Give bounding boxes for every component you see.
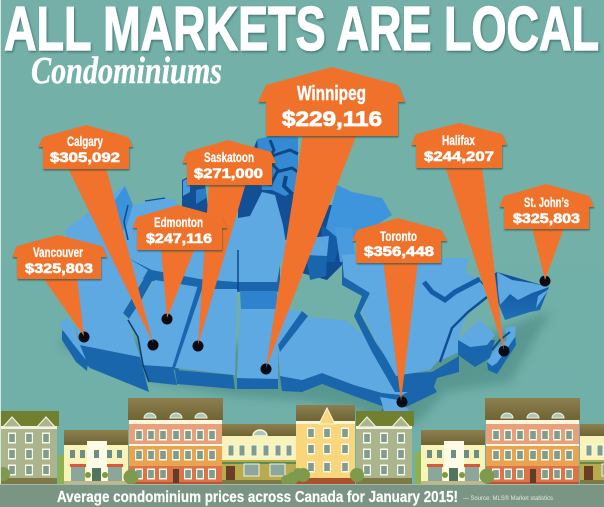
manitoba [237,291,302,389]
marker: Calgary: $305,092 [50,149,120,165]
marker: Winnipeg: $229,116 [282,108,382,131]
marker: Vancouver: $325,803 [25,260,93,276]
marker: Winnipeg [258,67,405,374]
marker: Vancouver [12,235,107,342]
subtitle: Condominiums [31,50,222,92]
marker: Saskatoon: $271,000 [194,165,263,181]
left edge strip [0,0,1,484]
east nunavut and baffin [298,185,392,280]
maritimes [458,320,516,374]
quebec [342,254,487,392]
marker: Vancouver: Vancouver [33,244,83,260]
caption band [0,484,604,507]
marker: Halifax: Halifax [442,132,475,148]
british columbia [59,258,156,392]
marker: Saskatoon: Saskatoon [204,149,254,165]
marker: St. John's [499,184,594,286]
arctic islands [182,136,298,240]
caption: Average condominium prices across Canada for January 2015! [57,489,458,506]
ontario [278,311,437,432]
alberta [128,280,198,385]
marker: Edmonton: $247,116 [146,230,212,246]
marker: Toronto: $356,448 [364,243,434,259]
marker: Halifax [411,123,510,356]
saskatchewan [172,285,237,389]
yellow building [296,405,355,484]
marker: St. John's: $325,803 [513,210,580,226]
marker: Toronto: Toronto [380,228,417,244]
marker: Calgary: Calgary [67,133,103,149]
marker: Halifax: $244,207 [424,148,494,164]
map of Canada [59,136,552,435]
marker: Edmonton: Edmonton [154,214,203,230]
source: — Source: MLS® Market statistics [463,494,554,502]
marker: Toronto [352,218,447,408]
bushes [0,467,494,485]
marker: Edmonton [132,205,227,324]
street of buildings [0,398,604,485]
marker: St. John's: St. John’s [524,194,569,210]
marker: Winnipeg: Winnipeg [297,83,366,105]
labrador and newfoundland [480,272,549,320]
marker: Saskatoon [182,140,276,352]
territories [65,185,287,292]
marker: Calgary [38,125,158,350]
